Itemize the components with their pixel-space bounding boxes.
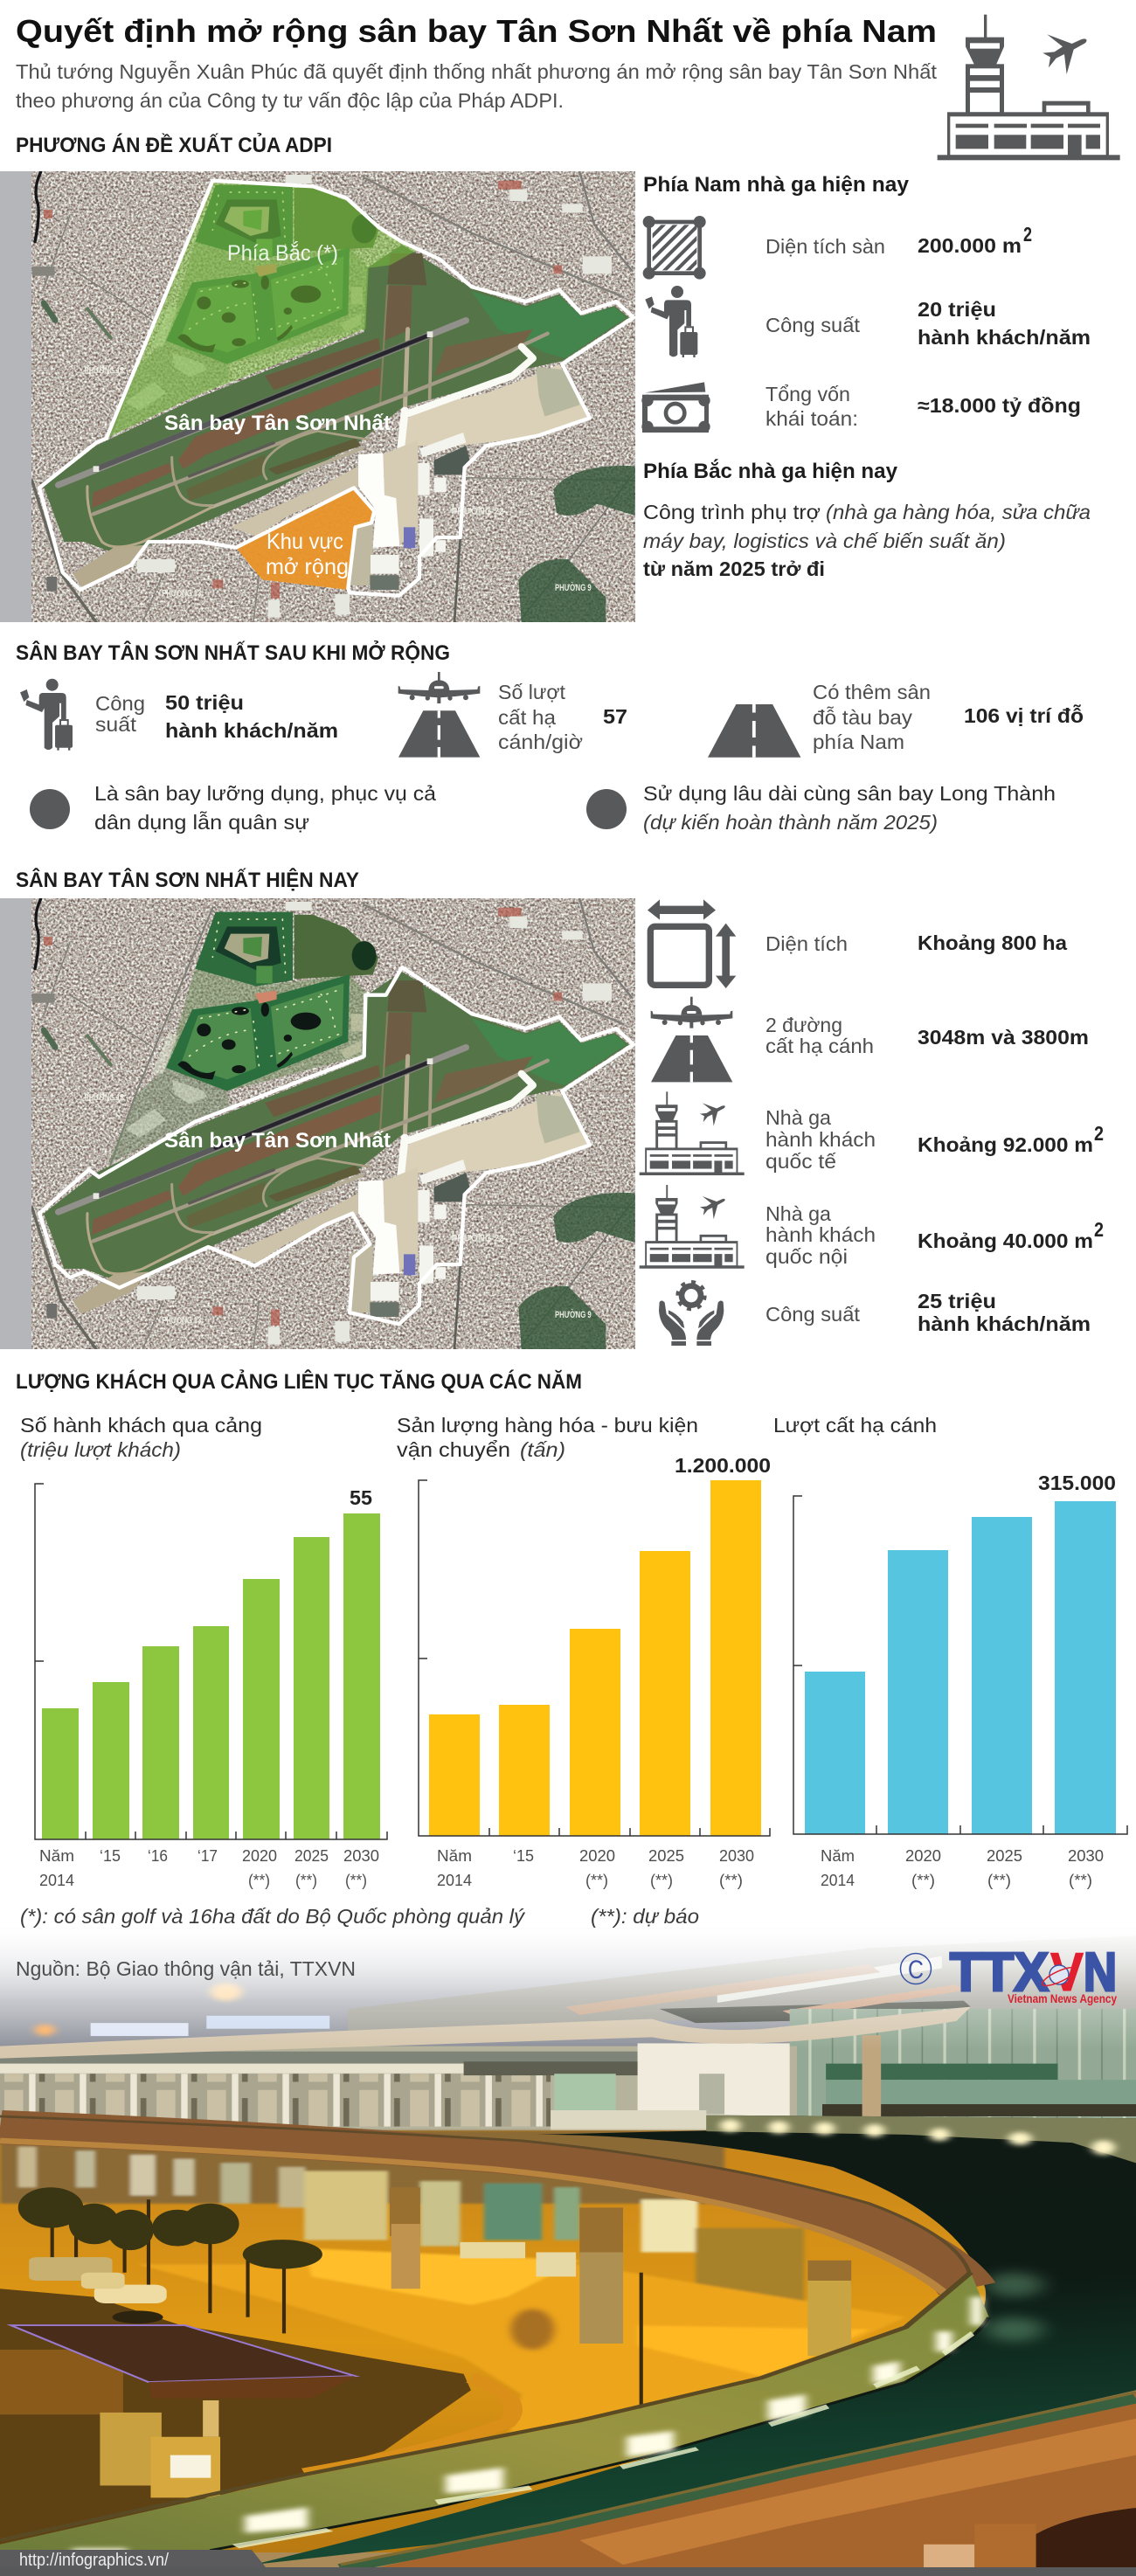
chart title	[20, 1414, 262, 1461]
bar chart: passengers: (**)	[345, 1872, 367, 1889]
bullet: dual use: dân dụng lẫn quân sự	[94, 811, 309, 834]
chart title: (tấn)	[520, 1438, 565, 1461]
icon: runway	[708, 704, 800, 758]
row: total investment: ≈18.000 tỷ đồng	[918, 394, 1081, 417]
logo: TTXVN Vietnam News Agency	[900, 1942, 1117, 2005]
source line: Nguồn: Bộ Giao thông vận tải, TTXVN	[16, 1957, 356, 1980]
stat: 57 movements per hour: Số lượt	[498, 681, 566, 703]
row: capacity: hành khách/năm	[918, 326, 1091, 349]
bar chart: aircraft movements: 315.000	[1038, 1472, 1116, 1494]
bar chart: passengers: 2020	[242, 1847, 277, 1865]
icon: plane over runway	[651, 997, 732, 1082]
row: total investment: khái toán:	[765, 407, 858, 430]
map highlight: expansion area	[236, 489, 374, 590]
row: total investment: Tổng vốn	[765, 383, 850, 405]
icon: traveller	[20, 679, 73, 751]
row: area	[765, 931, 1067, 955]
panel: south and north of terminal facts	[638, 173, 1091, 580]
stat: capacity 50 million: Công	[95, 692, 145, 715]
intro paragraph	[16, 60, 938, 112]
bar chart: cargo: (**)	[585, 1872, 608, 1889]
row: international terminal: quốc tế	[765, 1150, 836, 1173]
bullet: with Long Thanh: (dự kiến hoàn thành năm 2025)	[643, 811, 938, 834]
stat: capacity 50 million: hành khách/năm	[165, 719, 338, 742]
panel: current satellite map	[0, 898, 635, 1349]
row: international terminal: hành khách	[765, 1128, 876, 1151]
logo: TTXVN Vietnam News Agency: TTX	[950, 1942, 1049, 2003]
map label: airport name: Sân bay Tân Sơn Nhất	[164, 1129, 391, 1153]
bar chart: cargo: 2025	[648, 1847, 684, 1865]
bar chart: aircraft movements: (**)	[1069, 1872, 1092, 1889]
bar chart: passengers: Năm	[39, 1847, 74, 1865]
map label: airport name: Sân bay Tân Sơn Nhất	[164, 412, 391, 435]
row: runways: cất hạ cánh	[765, 1035, 874, 1057]
row: current capacity	[765, 1290, 1091, 1335]
bar chart: passengers: 2014	[39, 1872, 74, 1889]
icon: floor area	[643, 216, 706, 280]
photo: airport terminal at night	[0, 1928, 1136, 2576]
stat: capacity 50 million: 50 triệu	[165, 691, 244, 714]
bar chart: cargo: (**)	[650, 1872, 673, 1889]
stat: 106 parking positions	[813, 681, 1084, 753]
footnotes: (*): có sân golf và 16ha đất do Bộ Quốc phòng quản lý	[20, 1905, 526, 1928]
stat: 57 movements per hour	[498, 681, 627, 753]
bar chart: aircraft movements: 2020	[905, 1847, 941, 1865]
bar chart: passengers: (**)	[295, 1872, 317, 1889]
row: international terminal	[765, 1106, 1104, 1173]
row: floor area: 2	[1023, 223, 1032, 246]
bar chart: passengers: 2025	[294, 1847, 329, 1865]
stat: 106 parking positions: phía Nam	[813, 731, 904, 753]
icon: banknote	[641, 382, 710, 433]
icon: airport terminal and control tower	[938, 15, 1120, 160]
icon: area arrows	[648, 899, 736, 988]
row: domestic terminal	[765, 1202, 1104, 1268]
bar chart: passengers: (**)	[248, 1872, 270, 1889]
logo: TTXVN Vietnam News Agency: V	[1050, 1942, 1084, 2003]
map boundary line	[39, 181, 634, 596]
heading: south of terminal: Phía Nam nhà ga hiện nay	[643, 173, 910, 197]
text block: north side works: (nhà ga hàng hóa, sửa chữa	[826, 501, 1091, 523]
bar chart: cargo: (**)	[719, 1872, 743, 1889]
row: domestic terminal: Khoảng 40.000 m	[918, 1229, 1093, 1252]
text block: north side works: máy bay, logistics và chế biến suất ăn)	[643, 530, 1006, 552]
heading: north of terminal: Phía Bắc nhà ga hiện nay	[643, 459, 898, 483]
bar chart: aircraft movements: (**)	[987, 1872, 1011, 1889]
row: domestic terminal: 2	[1094, 1218, 1104, 1241]
bar chart: cargo: 2030	[719, 1847, 754, 1865]
stat: 106 parking positions: 106 vị trí đỗ	[964, 703, 1084, 727]
bar chart: passengers: 2030	[343, 1847, 379, 1865]
panel: proposal satellite map	[0, 171, 635, 622]
row: total investment	[765, 383, 1081, 430]
heading: after expansion: SÂN BAY TÂN SƠN NHẤT SAU KHI MỞ RỘNG	[16, 640, 450, 665]
row: capacity: Công suất	[765, 314, 861, 336]
row: floor area: Diện tích sàn	[765, 235, 885, 258]
map label: expansion area: mở rộng	[266, 555, 349, 579]
row: international terminal: Khoảng 92.000 m	[918, 1133, 1093, 1156]
logo: TTXVN Vietnam News Agency: Vietnam News Agency	[1008, 1991, 1117, 2005]
row: area: Diện tích	[765, 932, 848, 955]
heading: current airport: SÂN BAY TÂN SƠN NHẤT HIỆN NAY	[16, 868, 359, 892]
icon: international terminal	[640, 1091, 745, 1175]
title: Quyết định mở rộng sân bay Tân Sơn Nhất về phía Nam	[16, 13, 937, 49]
stat: 57 movements per hour: cánh/giờ	[498, 731, 583, 753]
bar chart: passengers: 55	[350, 1486, 372, 1509]
intro paragraph: Thủ tướng Nguyễn Xuân Phúc đã quyết định thống nhất phương án mở rộng sân bay Tân Sơn Nhất	[16, 60, 938, 83]
text block: north side works	[643, 501, 1091, 580]
row: runways: 3048m và 3800m	[918, 1026, 1089, 1049]
bullet: with Long Thanh: Sử dụng lâu dài cùng sân bay Long Thành	[643, 782, 1056, 805]
intro paragraph: theo phương án của Công ty tư vấn độc lập của Pháp ADPI.	[16, 89, 564, 112]
bar chart: cargo	[397, 1414, 771, 1889]
row: domestic terminal: quốc nội	[765, 1245, 848, 1268]
stat: 57 movements per hour: cất hạ	[498, 706, 556, 729]
map label: north area: Phía Bắc (*)	[227, 240, 338, 266]
stat: 106 parking positions: Có thêm sân	[813, 681, 931, 703]
footnotes: (**): dự báo	[591, 1905, 699, 1928]
row: international terminal: 2	[1094, 1122, 1104, 1145]
bar chart: cargo: 1.200.000	[675, 1454, 771, 1477]
heading: passenger growth: LƯỢNG KHÁCH QUA CẢNG LIÊN TỤC TĂNG QUA CÁC NĂM	[16, 1368, 582, 1394]
bar chart: passengers: ‘15	[100, 1847, 121, 1865]
bullet: with Long Thanh	[586, 782, 1056, 834]
map label: expansion area: Khu vực	[267, 530, 343, 554]
row: current capacity: Công suất	[765, 1303, 861, 1326]
icon: traveller	[645, 286, 697, 357]
row: runways: 2 đường	[765, 1014, 842, 1036]
bar chart: aircraft movements: Năm	[821, 1847, 855, 1865]
bar chart: passengers: ‘17	[197, 1847, 218, 1865]
panel: current airport facts	[640, 899, 1104, 1346]
icon: plane over runway	[398, 672, 480, 758]
row: area: Khoảng 800 ha	[918, 931, 1067, 954]
row: floor area	[765, 223, 1032, 258]
bar chart: aircraft movements: (**)	[911, 1872, 935, 1889]
row: current capacity: 25 triệu	[918, 1290, 996, 1312]
map label: expansion area	[266, 530, 349, 579]
text block: north side works: từ năm 2025 trở đi	[643, 557, 825, 580]
logo: TTXVN Vietnam News Agency: C	[908, 1956, 924, 1984]
bar chart: aircraft movements: 2025	[987, 1847, 1022, 1865]
bar chart: aircraft movements: 2014	[821, 1872, 855, 1889]
row: domestic terminal: hành khách	[765, 1223, 876, 1246]
heading: ADPI proposal: PHƯƠNG ÁN ĐỀ XUẤT CỦA ADPI	[16, 132, 332, 157]
bar chart: passengers	[20, 1414, 387, 1889]
bullet: dual use	[30, 782, 436, 834]
bar chart: aircraft movements	[773, 1414, 1127, 1889]
row: runways	[765, 1014, 1089, 1057]
bar chart: cargo: Năm	[437, 1847, 472, 1865]
row: capacity	[765, 298, 1091, 349]
map boundary line	[39, 967, 634, 1324]
chart title: Lượt cất hạ cánh	[773, 1414, 937, 1437]
bar chart: cargo: ‘15	[513, 1847, 534, 1865]
chart title	[397, 1414, 698, 1461]
icon: domestic terminal	[640, 1185, 745, 1269]
bar chart: cargo: 2014	[437, 1872, 472, 1889]
panel: after expansion	[16, 640, 1084, 834]
chart title: Sản lượng hàng hóa - bưu kiện	[397, 1414, 698, 1437]
bar chart: aircraft movements: 2030	[1068, 1847, 1104, 1865]
bullet: dual use: Là sân bay lưỡng dụng, phục vụ cả	[94, 782, 436, 805]
row: domestic terminal: Nhà ga	[765, 1202, 831, 1225]
logo: TTXVN Vietnam News Agency: N	[1084, 1942, 1117, 2003]
row: capacity: 20 triệu	[918, 298, 996, 321]
row: international terminal: Nhà ga	[765, 1106, 831, 1129]
footer bar with website	[0, 2550, 1136, 2576]
stat: capacity 50 million: suất	[95, 713, 137, 736]
stat: 57 movements per hour: 57	[603, 705, 627, 728]
row: current capacity: hành khách/năm	[918, 1312, 1091, 1335]
chart title: vận chuyển	[397, 1438, 510, 1461]
bar chart: passengers: ‘16	[148, 1847, 168, 1865]
icon: gear in hands	[659, 1282, 724, 1346]
chart title: Số hành khách qua cảng	[20, 1414, 262, 1437]
text block: north side works: Công trình phụ trợ	[643, 501, 821, 523]
footer bar with website: http://infographics.vn/	[19, 2551, 169, 2570]
stat: 106 parking positions: đỗ tàu bay	[813, 706, 913, 729]
row: floor area: 200.000 m	[918, 234, 1022, 257]
bar chart: cargo: 2020	[579, 1847, 615, 1865]
chart title: (triệu lượt khách)	[20, 1438, 181, 1461]
stat: capacity 50 million	[95, 691, 338, 742]
